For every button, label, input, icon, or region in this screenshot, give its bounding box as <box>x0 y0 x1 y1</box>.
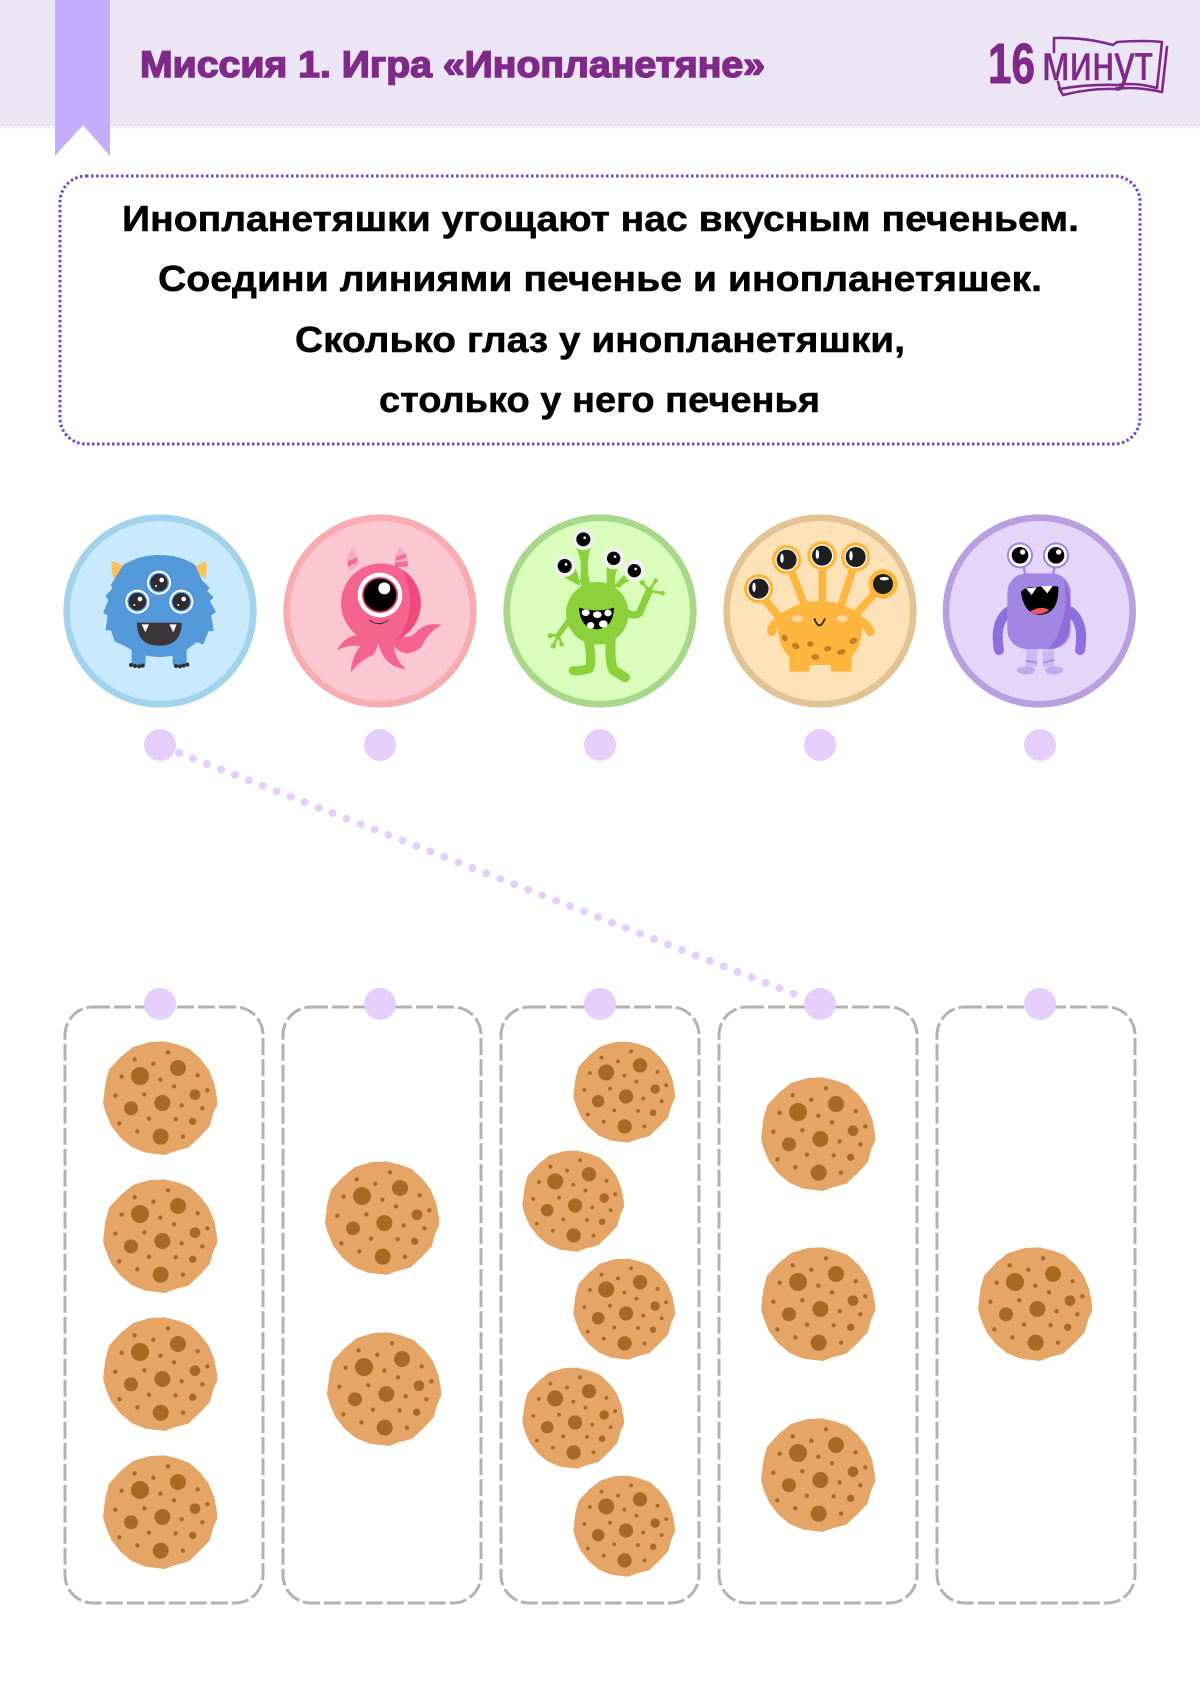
alien 4: orange five-eyed monster <box>727 518 913 704</box>
title: Миссия 1. Игра «Инопланетяне» <box>140 44 765 85</box>
instruction panel <box>60 176 1140 444</box>
cookie column 2: two cookies <box>283 1007 481 1603</box>
alien 1: blue three-eyed monster <box>67 518 253 704</box>
logo: 16 минут <box>988 32 1167 96</box>
connection dots: cookies <box>144 988 1056 1020</box>
cookie column 4: three cookies <box>719 1007 917 1603</box>
instruction line 1: Инопланетяшки угощают нас вкусным печеньем. <box>122 198 1079 239</box>
logo: 16 минут: 16 <box>988 32 1035 96</box>
connection dots: aliens <box>144 729 1056 761</box>
cookie column 1: four cookies <box>65 1007 263 1603</box>
header band <box>0 0 1200 127</box>
dotted connecting line example <box>179 753 802 997</box>
alien 3: green four-eyed monster <box>507 518 693 704</box>
logo: 16 минут: минут <box>1042 35 1153 91</box>
alien 2: pink one-eyed octopus <box>287 518 473 704</box>
instruction line 2: Соедини линиями печенье и инопланетяшек. <box>158 258 1042 299</box>
instruction line 3: Сколько глаз у инопланетяшки, <box>295 319 905 360</box>
bookmark ribbon <box>55 0 110 156</box>
alien 5: purple two-eyed monster <box>946 518 1133 704</box>
cookie column 5: one cookie <box>937 1007 1135 1603</box>
instruction line 4: столько у него печенья <box>379 379 820 420</box>
cookie column 3: five cookies <box>501 1007 699 1603</box>
